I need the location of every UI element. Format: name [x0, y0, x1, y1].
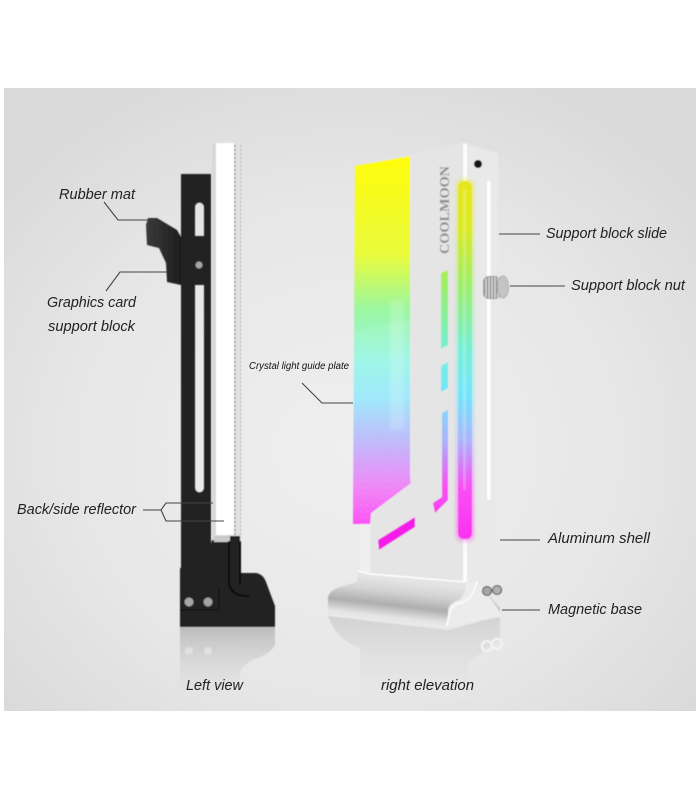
lower L slot — [433, 410, 448, 513]
support block clamp — [146, 218, 181, 285]
crystal plate side — [212, 143, 241, 541]
screw on plate — [196, 262, 202, 268]
label: graphics card support block — [47, 295, 137, 335]
mount hole — [474, 160, 482, 168]
label: rubber mat: Rubber mat — [59, 187, 136, 203]
brand text: COOLMOON — [438, 166, 453, 254]
label: right elevation: right elevation — [381, 678, 474, 694]
base screws — [482, 586, 492, 596]
aluminum shell body — [370, 143, 498, 600]
left view product — [146, 143, 275, 690]
slide slot — [487, 181, 490, 500]
background panel — [4, 88, 696, 711]
label: graphics card support block: Graphics card — [47, 295, 137, 311]
crystal light guide plate — [353, 156, 411, 524]
reflection of right base — [328, 616, 500, 700]
right elevation product — [328, 143, 508, 700]
base screws — [184, 598, 194, 606]
reflection of left view base — [180, 627, 275, 690]
label: back/side reflector: Back/side reflector — [17, 502, 137, 518]
label: graphics card support block: support block — [48, 319, 136, 335]
black back plate — [181, 174, 211, 570]
magenta slot — [378, 517, 415, 550]
label: magnetic base: Magnetic base — [548, 602, 642, 618]
black base — [180, 536, 275, 627]
callout lines — [104, 202, 565, 610]
rainbow vertical bar — [456, 179, 474, 541]
magnetic base — [328, 572, 500, 627]
label: aluminum shell: Aluminum shell — [547, 531, 651, 547]
label: support block slide: Support block slide — [546, 226, 667, 242]
green slot — [441, 270, 448, 349]
cyan slot — [441, 362, 448, 392]
support block nut — [483, 276, 508, 299]
label: crystal light guide plate: Crystal light guide plate — [249, 361, 349, 372]
label: support block nut: Support block nut — [571, 278, 686, 294]
label: left view: Left view — [186, 678, 245, 694]
